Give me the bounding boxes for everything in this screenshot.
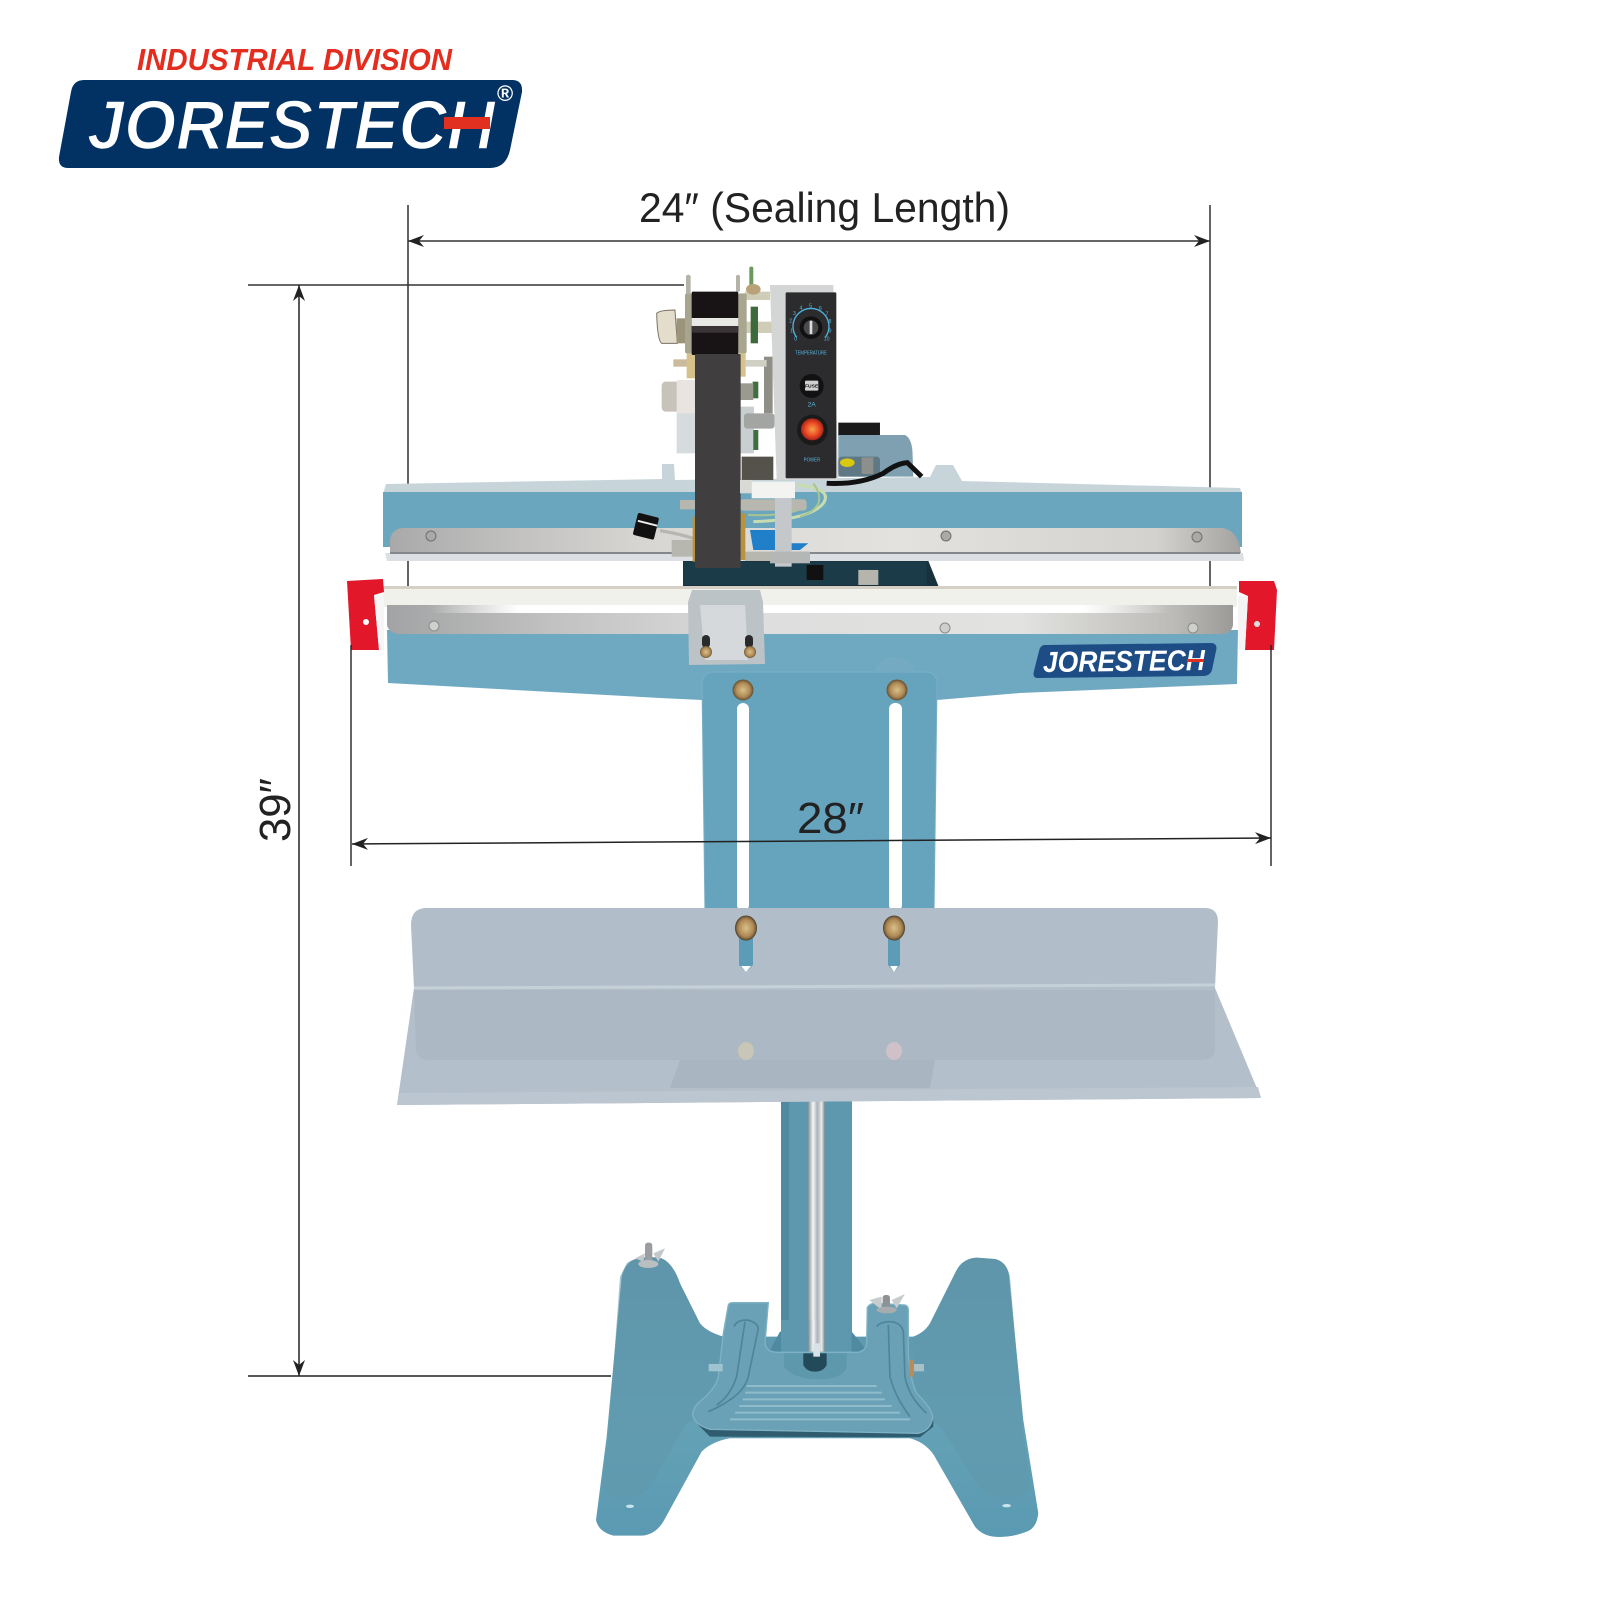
control panel <box>770 285 838 480</box>
white bracket <box>740 480 810 567</box>
tray reflections <box>738 1042 754 1060</box>
height label: 39″ <box>251 778 300 842</box>
upper jaw top surface <box>383 464 1242 494</box>
temperature dial ticks <box>793 308 829 337</box>
width label: 28″ <box>797 794 864 843</box>
lower knob and cylinder <box>662 382 680 412</box>
control panel: 6 <box>819 306 822 312</box>
wing nut right <box>869 1294 905 1313</box>
upper jaw front <box>383 492 1242 534</box>
dimension: overall width <box>351 645 1271 866</box>
feed tray <box>397 908 1261 1105</box>
temperature label: TEMPERATURE <box>795 351 827 357</box>
control panel: 5 <box>809 303 812 309</box>
tray slots <box>739 938 753 972</box>
control panel: 7 <box>825 312 828 318</box>
control panel: 8 <box>828 319 831 325</box>
lower jaw white bar <box>383 587 1237 607</box>
control panel: 10 <box>824 337 830 343</box>
logo: Jorestech Industrial Division <box>59 42 522 168</box>
brass contacts <box>693 517 697 562</box>
heading: industrial division: INDUSTRIAL DIVISION <box>137 42 453 77</box>
ribbon left knob <box>657 310 677 343</box>
lower screws <box>429 621 439 631</box>
sealer machine <box>347 267 1277 1537</box>
upper jaw lip <box>385 553 1244 561</box>
black tilt knob <box>633 513 693 540</box>
control panel: 9 <box>828 328 831 334</box>
pedal shadow <box>698 1420 933 1437</box>
power switch <box>797 415 828 445</box>
power label: POWER <box>804 457 820 463</box>
control panel: 0 <box>794 337 797 343</box>
dark frame behind jaws <box>683 560 940 590</box>
fuse rating: 2A <box>808 402 816 409</box>
control panel: 1 <box>790 329 793 335</box>
strip screws <box>426 531 436 541</box>
green wires <box>753 485 825 522</box>
upper jaw <box>383 464 1244 561</box>
wing nut left <box>635 1243 665 1268</box>
control panel: 2 <box>789 319 792 325</box>
column bolts <box>733 680 753 700</box>
gray bracket <box>688 590 765 665</box>
sealing length label: 24″ (Sealing Length) <box>639 184 1010 231</box>
ribbon roll <box>692 292 738 355</box>
pedal axle pins <box>709 1364 723 1371</box>
mechanism <box>677 267 775 480</box>
control panel: FUSE <box>805 384 819 390</box>
logo red bar <box>444 117 490 129</box>
lower jaw <box>347 579 1277 700</box>
upper sealing strip <box>390 528 1241 553</box>
blue component <box>750 530 808 550</box>
lower sealing strip <box>387 605 1233 634</box>
control panel: 4 <box>799 305 802 311</box>
registered mark: ® <box>497 81 513 106</box>
power cord <box>827 463 922 484</box>
height arrow <box>298 285 300 1376</box>
left red end cap <box>347 579 384 650</box>
dark block under head <box>683 562 927 585</box>
rear housing <box>827 423 922 484</box>
lower jaw body <box>387 630 1238 700</box>
ribbon flanges <box>686 275 740 293</box>
control panel: 3 <box>793 311 796 317</box>
green pin <box>749 267 753 290</box>
tray bolts <box>736 916 756 940</box>
yellow button <box>840 458 855 467</box>
jaw badge <box>1034 643 1216 679</box>
tray crease <box>414 985 1215 988</box>
pedal <box>693 1303 933 1433</box>
column below tray <box>781 1100 852 1370</box>
temperature knob <box>800 316 822 339</box>
foot base <box>596 1243 1038 1537</box>
jaw badge wordmark: JORESTECH <box>1043 645 1206 679</box>
fuse holder <box>800 374 824 398</box>
column collar <box>770 1332 867 1357</box>
tray back panel <box>411 908 1218 988</box>
logo wordmark: JORESTECH <box>87 86 496 164</box>
pedal rod slot <box>803 1353 827 1372</box>
column slots <box>737 703 749 911</box>
column plate <box>702 657 937 915</box>
sealing length arrow <box>408 240 1210 242</box>
ribbon belt <box>695 354 741 568</box>
logo badge <box>59 80 522 168</box>
coding head <box>633 267 927 585</box>
width arrow <box>352 838 1271 844</box>
tray front panel <box>397 988 1261 1105</box>
tray lip <box>397 1087 1261 1105</box>
plate cap <box>875 657 915 672</box>
lower screws and fittings <box>672 499 808 561</box>
right red end cap <box>1238 581 1277 650</box>
